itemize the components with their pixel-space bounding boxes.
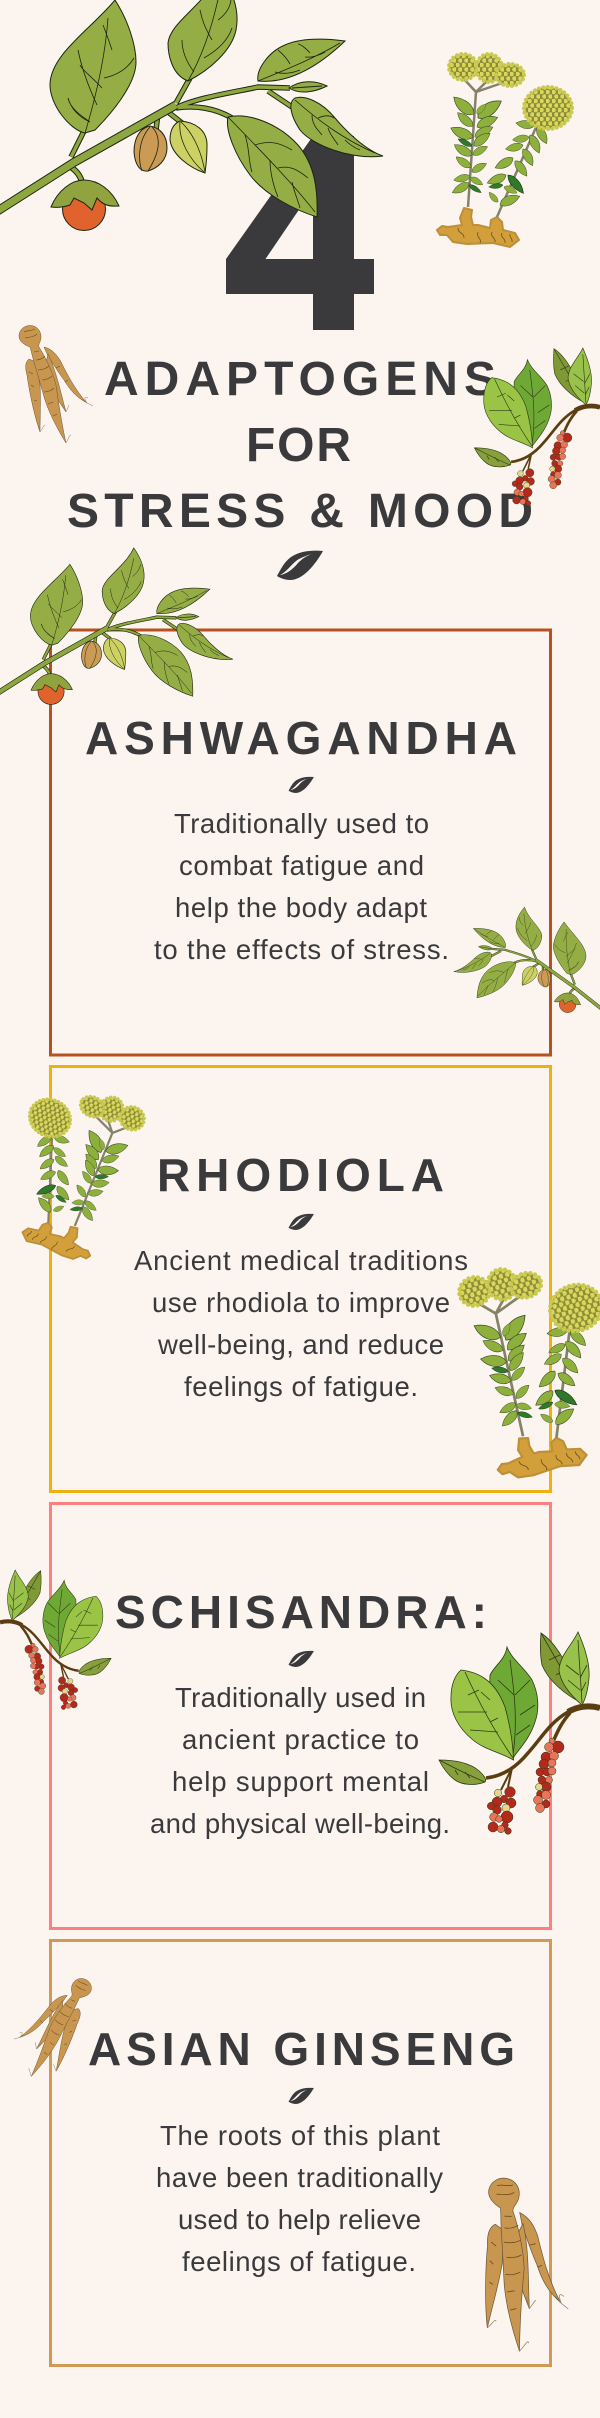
title <box>67 353 533 538</box>
title line: FOR: FOR <box>246 419 351 472</box>
body text: The roots of this plant <box>160 2120 440 2151</box>
body text: Traditionally used in <box>175 1682 426 1713</box>
panel: ashwagandha <box>50 630 550 1055</box>
icon: title leaf ornament <box>277 551 323 580</box>
body text <box>150 1682 450 1839</box>
icon: leaf ornament <box>289 1214 314 1230</box>
body text: to the effects of stress. <box>154 934 449 965</box>
illustration: ashwagandha branch, panel top left <box>0 548 233 704</box>
panel: asian ginseng <box>50 1940 550 2366</box>
illustration: schisandra branch, top <box>474 348 600 506</box>
icon: leaf ornament <box>289 1651 314 1667</box>
illustration: ashwagandha branch, panel bottom right <box>451 901 600 1016</box>
body text: ancient practice to <box>182 1724 419 1755</box>
body text <box>134 1245 468 1402</box>
panel border <box>50 1504 550 1928</box>
icon: leaf ornament <box>289 777 314 793</box>
body text: Traditionally used to <box>174 808 429 839</box>
body text: combat fatigue and <box>179 850 424 881</box>
heading: SCHISANDRA: <box>115 1586 487 1638</box>
body text: and physical well-being. <box>150 1808 450 1839</box>
body text: used to help relieve <box>178 2204 421 2235</box>
title line: ADAPTOGENS: ADAPTOGENS <box>104 353 496 406</box>
body text: help the body adapt <box>175 892 427 923</box>
big number 4 <box>226 136 374 330</box>
body text: have been traditionally <box>156 2162 443 2193</box>
illustration: rhodiola plant, panel bottom right <box>443 1244 600 1488</box>
body text: well-being, and reduce <box>157 1329 444 1360</box>
body text: feelings of fatigue. <box>184 1371 418 1402</box>
panel border <box>50 630 550 1055</box>
illustration: rhodiola plant, top <box>437 54 572 247</box>
panel: schisandra <box>50 1504 550 1928</box>
body text <box>154 808 449 965</box>
illustration: schisandra branch, panel left <box>0 1570 111 1710</box>
heading: RHODIOLA <box>157 1149 444 1201</box>
body text: Ancient medical traditions <box>134 1245 468 1276</box>
heading: ASHWAGANDHA <box>85 712 517 764</box>
icon: leaf ornament <box>289 2088 314 2104</box>
body text: feelings of fatigue. <box>182 2246 416 2277</box>
illustration: ashwagandha branch, top <box>0 0 383 230</box>
heading: ASIAN GINSENG <box>88 2023 515 2075</box>
illustration: ginseng root, panel bottom right <box>455 2175 594 2360</box>
panel border <box>50 1940 550 2366</box>
panel border <box>50 1066 550 1492</box>
title line: STRESS & MOOD: STRESS & MOOD <box>67 485 533 538</box>
body text: use rhodiola to improve <box>152 1287 450 1318</box>
body text <box>156 2120 443 2277</box>
illustration: ginseng root, top <box>19 326 93 443</box>
panel: rhodiola <box>50 1066 550 1492</box>
illustration: schisandra branch, panel right <box>439 1632 600 1834</box>
body text: help support mental <box>172 1766 429 1797</box>
illustration: ginseng root, panel top left <box>7 1968 93 2085</box>
illustration: rhodiola plant, panel top left <box>0 1067 157 1269</box>
